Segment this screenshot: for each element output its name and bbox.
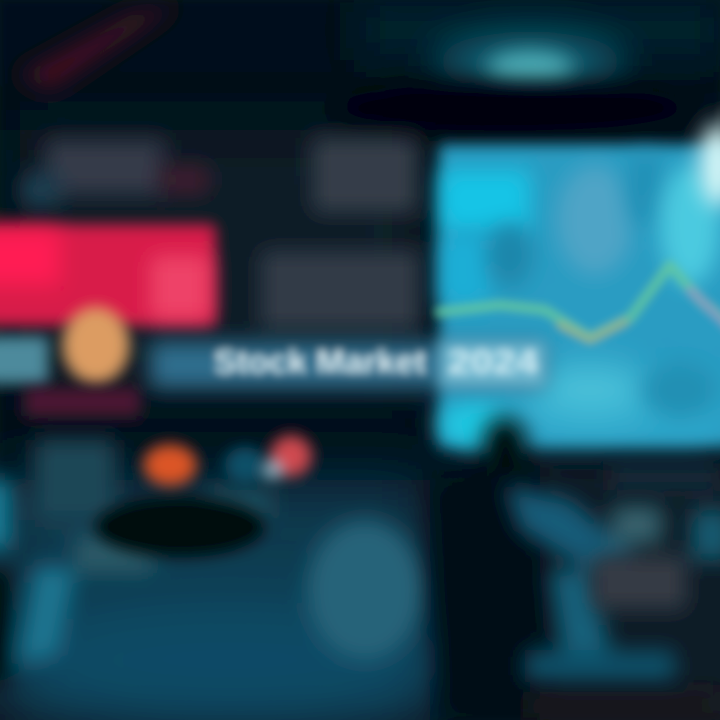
center blue-gray blob [307, 520, 423, 660]
orange light [144, 445, 196, 485]
ceiling light [435, 32, 625, 92]
orange figure [63, 307, 129, 383]
right teal figure [505, 485, 675, 682]
title text bar: 2024 [448, 343, 539, 380]
blue light [225, 447, 265, 483]
top gray panels [20, 138, 420, 330]
title text bar: Stock Market [214, 343, 426, 380]
right desk [530, 465, 720, 720]
right screen [440, 123, 720, 445]
right dark silhouette [430, 417, 550, 720]
chart line [440, 265, 720, 340]
ceiling red streak [20, 5, 175, 90]
maroon band [25, 388, 140, 416]
title text bar [150, 342, 545, 388]
dark overhead shape [330, 82, 690, 134]
red panel [0, 225, 215, 325]
left cyan bar [0, 337, 48, 383]
dark desk shape [95, 497, 265, 557]
left teal figure [0, 440, 270, 680]
right dark background [540, 470, 720, 720]
red white light [262, 436, 311, 479]
